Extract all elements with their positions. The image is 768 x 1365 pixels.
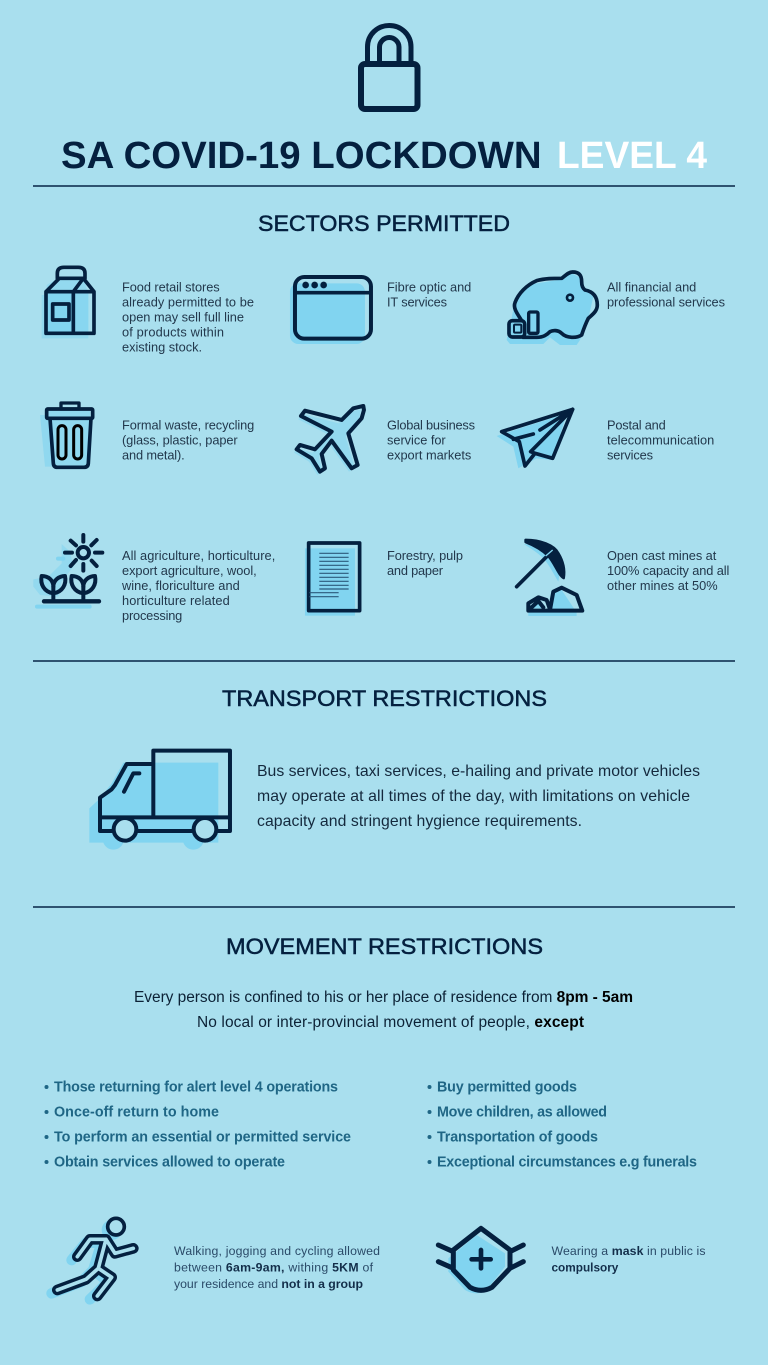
icon: truck (89, 751, 230, 850)
text: fibre optic: IT services (387, 294, 447, 310)
icon: airplane (294, 406, 364, 475)
text: agriculture: horticulture related (122, 593, 230, 608)
text: agriculture (121, 548, 275, 623)
text: waste: and metal). (122, 448, 185, 462)
text: food retail: of products within (122, 324, 224, 340)
text: transport (257, 763, 700, 830)
panel: sectors permitted (33, 267, 729, 623)
text: forestry: Forestry, pulp (387, 548, 463, 563)
text: agriculture: export agriculture, wool, (122, 563, 257, 578)
text: global business: export markets (387, 448, 471, 462)
icon: piggy bank (507, 272, 597, 345)
heading: movement restrictions: MOVEMENT RESTRICTIONS (226, 934, 543, 959)
heading: sectors permitted: SECTORS PERMITTED (258, 211, 510, 236)
text: mines: 100% capacity and all (607, 563, 729, 578)
text: fibre optic: Fibre optic and (387, 280, 471, 294)
heading: transport restrictions: TRANSPORT RESTRICTIONS (222, 686, 547, 711)
icon: plants and sun (33, 535, 102, 609)
icon: face mask (438, 1228, 523, 1293)
text: food retail: already permitted to be (122, 294, 254, 310)
text: food retail: existing stock. (122, 340, 202, 354)
text: forestry (387, 548, 463, 578)
text: exercise: between 6am-9am, withing 5KM of (174, 1260, 374, 1274)
text: exercise: your residence and not in a group (174, 1277, 363, 1291)
text: movement intro: No local or inter-provincial movement of people, except (197, 1014, 584, 1031)
text: agriculture: processing (122, 608, 182, 623)
title: LEVEL 4 (557, 135, 707, 177)
list: exceptions right: Move children, as allowed (437, 1105, 607, 1121)
text: movement intro: Every person is confined to his or her place of residence from 8pm - 5am (134, 989, 633, 1006)
list: exceptions left: Obtain services allowed to operate (54, 1155, 285, 1171)
text: mines: other mines at 50% (607, 578, 718, 593)
text: mines: Open cast mines at (607, 548, 717, 563)
title: SA COVID-19 LOCKDOWN (61, 135, 542, 177)
icon: milk carton (42, 267, 94, 338)
text: exercise: Walking, jogging and cycling allowed (174, 1244, 380, 1258)
list: exceptions left (44, 1080, 351, 1171)
text: fibre optic (387, 280, 471, 310)
icon: document (305, 543, 360, 616)
list: exceptions right: Transportation of goods (437, 1130, 598, 1146)
text: global business: service for (387, 432, 446, 448)
icon: browser window (290, 277, 371, 344)
list: exceptions right: Exceptional circumstances e.g funerals (437, 1155, 697, 1171)
text: postal: Postal and (607, 418, 666, 432)
text: global business (387, 418, 475, 462)
icon: padlock (361, 26, 418, 109)
text: waste: Formal waste, recycling (122, 418, 254, 432)
icon: paper plane (497, 409, 573, 468)
text: movement intro (134, 989, 633, 1031)
text: transport: may operate at all times of the day, with limitations on vehicle (257, 788, 690, 805)
list: exceptions right: Buy permitted goods (437, 1080, 577, 1096)
text: transport: capacity and stringent hygience requirements. (257, 813, 582, 830)
text: agriculture: All agriculture, horticulture, (122, 548, 275, 563)
list: exceptions left: To perform an essential or permitted service (54, 1130, 351, 1146)
text: waste: (glass, plastic, paper (122, 432, 238, 448)
list: exceptions left: Once-off return to home (54, 1105, 219, 1121)
icon: trash can (40, 403, 93, 467)
text: mask: Wearing a mask in public is (552, 1244, 706, 1258)
text: agriculture: wine, floriculture and (121, 578, 240, 593)
text: forestry: and paper (387, 563, 444, 578)
list: exceptions right (428, 1080, 697, 1171)
text: food retail: Food retail stores (122, 280, 220, 294)
text: financial: All financial and (607, 280, 696, 294)
text: postal: telecommunication (607, 432, 714, 448)
text: postal (607, 418, 714, 462)
text: waste (122, 418, 254, 462)
text: mines (607, 548, 729, 593)
text: food retail (122, 280, 254, 354)
icon: pickaxe and rocks (517, 540, 582, 616)
text: financial (607, 280, 725, 310)
text: transport: Bus services, taxi services, e-hailing and private motor vehicles (257, 763, 700, 780)
text: food retail: open may sell full line (122, 310, 244, 324)
list: exceptions left: Those returning for alert level 4 operations (54, 1080, 338, 1096)
text: financial: professional services (607, 294, 725, 310)
text: mask (552, 1244, 706, 1274)
text: exercise (174, 1244, 380, 1291)
text: postal: services (607, 448, 653, 462)
text: global business: Global business (387, 418, 475, 432)
text: mask: compulsory (552, 1260, 619, 1274)
icon: runner (52, 1218, 133, 1299)
